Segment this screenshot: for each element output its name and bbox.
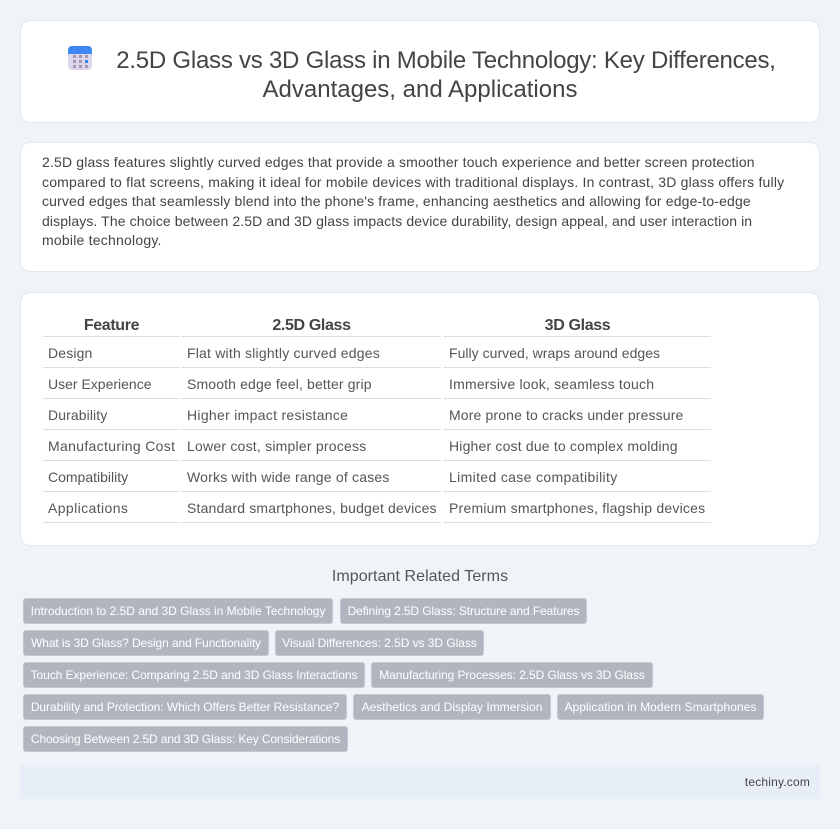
comparison table — [43, 317, 711, 523]
row: applications: Premium smartphones, flagship devices — [449, 500, 705, 516]
row: design: Flat with slightly curved edges — [187, 345, 380, 361]
row: design — [48, 345, 660, 361]
icon: calendar grid — [68, 46, 92, 70]
tag: Aesthetics and Display Immersion — [362, 700, 542, 714]
row: manufacturing cost: Manufacturing Cost — [48, 438, 175, 454]
row: manufacturing cost — [48, 438, 678, 454]
tag: Introduction to 2.5D and 3D Glass in Mobile Technology — [31, 604, 325, 618]
row: durability: Higher impact resistance — [187, 407, 348, 423]
row: compatibility: Compatibility — [48, 469, 128, 485]
intro text: 2.5D glass features slightly curved edges that provide a smoother touch experience and better screen protection — [42, 154, 755, 170]
title: Advantages, and Applications — [263, 76, 577, 103]
row: applications — [48, 500, 705, 516]
footer bar — [20, 765, 820, 799]
header panel — [20, 20, 820, 123]
tag — [557, 694, 764, 720]
tag: Manufacturing Processes: 2.5D Glass vs 3D Glass — [379, 668, 645, 682]
intro text: mobile technology. — [42, 232, 162, 248]
row: compatibility: Limited case compatibility — [449, 469, 618, 485]
row: user experience — [48, 376, 654, 392]
table header: 2.5D Glass — [272, 317, 351, 334]
row: compatibility: Works with wide range of cases — [187, 469, 390, 485]
footer source: techiny.com — [745, 775, 810, 789]
tag — [340, 598, 587, 624]
panel: intro — [20, 142, 820, 272]
row: design: Fully curved, wraps around edges — [449, 345, 660, 361]
title — [116, 47, 776, 103]
row: applications: Applications — [48, 500, 128, 516]
tag — [23, 630, 269, 656]
table header: 3D Glass — [545, 317, 610, 334]
intro text — [42, 154, 784, 248]
tag: Touch Experience: Comparing 2.5D and 3D Glass Interactions — [31, 668, 357, 682]
row: applications: Standard smartphones, budget devices — [187, 500, 437, 516]
related terms tags — [23, 598, 764, 752]
row: user experience: Smooth edge feel, better grip — [187, 376, 372, 392]
row: durability — [48, 407, 683, 423]
tag — [23, 598, 333, 624]
row: manufacturing cost: Higher cost due to complex molding — [449, 438, 678, 454]
tag — [23, 694, 347, 720]
related terms heading: Important Related Terms — [332, 568, 508, 585]
row: manufacturing cost: Lower cost, simpler process — [187, 438, 366, 454]
row: user experience: Immersive look, seamless touch — [449, 376, 654, 392]
tag: Durability and Protection: Which Offers Better Resistance? — [31, 700, 339, 714]
tag — [371, 662, 653, 688]
tag: Application in Modern Smartphones — [564, 700, 757, 714]
tag — [353, 694, 551, 720]
title: 2.5D Glass vs 3D Glass in Mobile Technology: Key Differences, — [116, 47, 776, 74]
table header — [84, 317, 610, 334]
tag: Defining 2.5D Glass: Structure and Features — [348, 604, 579, 618]
row: durability: Durability — [48, 407, 107, 423]
tag — [23, 662, 365, 688]
tag — [275, 630, 484, 656]
intro text: compared to flat screens, making it ideal for mobile devices with traditional displays. In contrast, 3D glass offers fully — [42, 174, 784, 190]
row: user experience: User Experience — [48, 376, 152, 392]
tag: Choosing Between 2.5D and 3D Glass: Key Considerations — [31, 732, 340, 746]
table header: Feature — [84, 317, 139, 334]
row: durability: More prone to cracks under pressure — [449, 407, 683, 423]
tag — [23, 726, 348, 752]
panel: comparison table — [20, 292, 820, 546]
intro text: displays. The choice between 2.5D and 3D glass impacts device durability, design appeal, and user interaction in — [42, 213, 752, 229]
row: design: Design — [48, 345, 92, 361]
intro text: curved edges that seamlessly blend into the phone's frame, enhancing aesthetics and allowing for edge-to-edge — [42, 193, 751, 209]
row: compatibility — [48, 469, 618, 485]
tag: What is 3D Glass? Design and Functionality — [31, 636, 261, 650]
tag: Visual Differences: 2.5D vs 3D Glass — [282, 636, 477, 650]
